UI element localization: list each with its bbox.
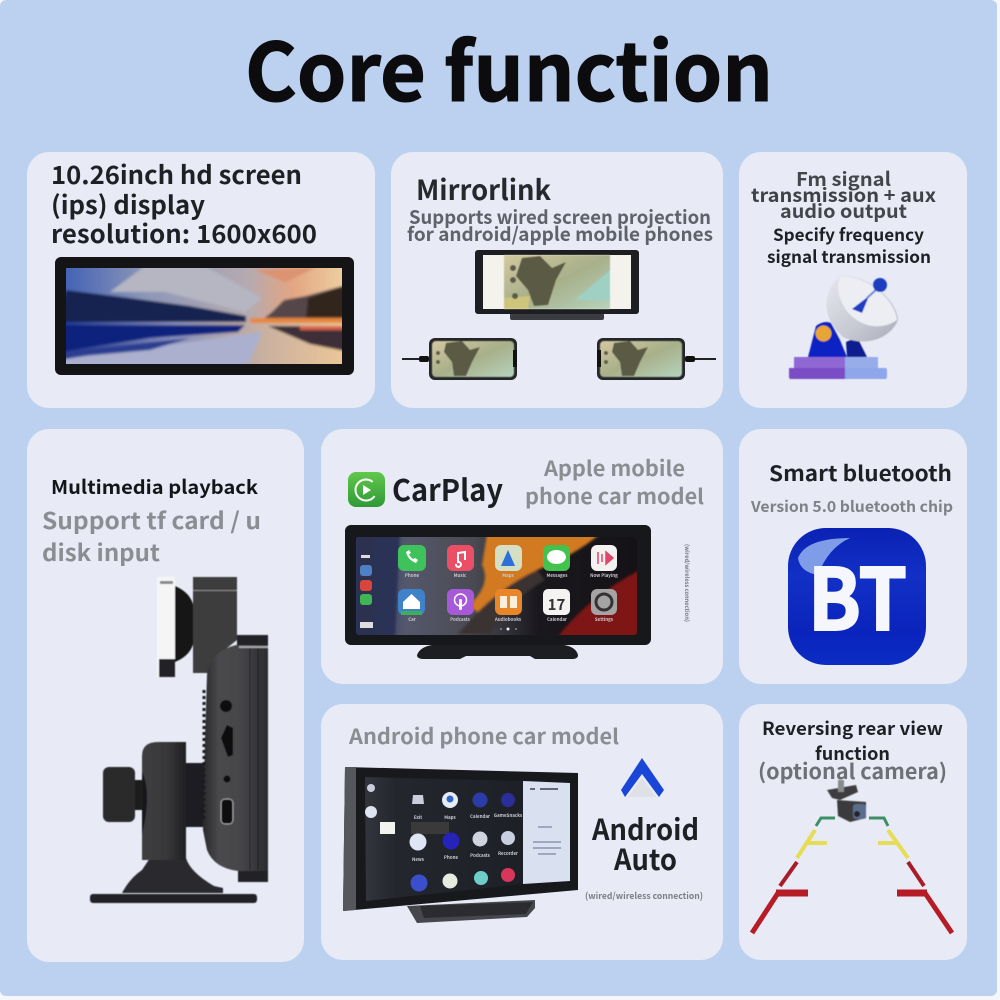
logo text: Android Auto: Auto bbox=[613, 837, 677, 879]
description: screen projection: for android/apple mobile phones bbox=[407, 220, 713, 247]
heading: screen specs: resolution: 1600x600 bbox=[51, 215, 317, 251]
description: optional camera: (optional camera) bbox=[758, 756, 947, 786]
logo text: Android Auto: Android bbox=[591, 807, 699, 849]
panel: smart bluetooth bbox=[739, 429, 967, 684]
carplay app icons: Maps bbox=[502, 573, 515, 579]
heading: screen specs: (ips) display bbox=[51, 186, 206, 222]
android app icons: Recorder bbox=[498, 851, 518, 857]
carplay app icons: Calendar bbox=[547, 617, 567, 623]
heading: screen specs: 10.26inch hd screen bbox=[51, 156, 302, 192]
carplay app icons: Podcasts bbox=[450, 617, 471, 623]
carplay app icons bbox=[398, 545, 618, 623]
android app icons: Podcasts bbox=[470, 853, 491, 859]
icon: satellite dish bbox=[789, 276, 898, 379]
description: tf card input: disk input bbox=[42, 534, 160, 568]
icon: rear camera bbox=[827, 780, 866, 822]
description: bluetooth chip: Version 5.0 bluetooth chip bbox=[750, 496, 953, 517]
heading: Mirrorlink: Mirrorlink bbox=[416, 169, 551, 209]
left phone with cable bbox=[402, 338, 517, 380]
carplay app icons: Audiobooks bbox=[494, 616, 522, 623]
heading: fm transmission: audio output bbox=[780, 197, 907, 224]
description: frequency: signal transmission bbox=[767, 243, 931, 268]
heading: apple car model bbox=[525, 453, 704, 511]
icon: carplay logo bbox=[348, 472, 385, 507]
heading: bluetooth: Smart bluetooth bbox=[769, 458, 952, 488]
heading: fm transmission bbox=[751, 165, 936, 224]
icon: BT badge: BT bbox=[808, 532, 907, 655]
heading: reversing: Reversing rear view bbox=[762, 715, 943, 741]
panel: mirrorlink bbox=[391, 152, 723, 408]
description: frequency bbox=[767, 221, 931, 268]
carplay head unit bbox=[345, 525, 651, 659]
panel: hd screen bbox=[27, 152, 375, 408]
heading: apple car model: phone car model bbox=[525, 481, 704, 511]
description: screen projection bbox=[407, 203, 713, 247]
heading: reversing bbox=[762, 715, 943, 766]
android app icons: Exit bbox=[414, 814, 422, 821]
logo text: Android Auto bbox=[591, 807, 699, 879]
heading: fm transmission: Fm signal bbox=[796, 165, 891, 192]
android app icons: Maps bbox=[444, 815, 457, 821]
parking guide lines bbox=[752, 818, 952, 933]
panel: carplay bbox=[321, 429, 723, 684]
carplay app icons: Phone bbox=[405, 573, 419, 579]
icon: android auto chevron bbox=[621, 758, 664, 797]
panel: android auto bbox=[321, 704, 723, 960]
carplay app icons: Settings bbox=[595, 616, 614, 623]
carplay app icons: Music bbox=[454, 572, 467, 579]
heading: screen specs bbox=[51, 156, 317, 251]
android app icons: News bbox=[412, 857, 425, 863]
heading: android car model: Android phone car model bbox=[348, 721, 619, 751]
description: screen projection: Supports wired screen projection bbox=[409, 203, 711, 230]
description: tf card input bbox=[42, 502, 261, 568]
head unit mirroring phone bbox=[475, 250, 639, 320]
android app icons: Phone bbox=[444, 855, 458, 861]
heading: multimedia: Multimedia playback bbox=[51, 473, 259, 500]
android app icons: GameSnacks bbox=[494, 812, 523, 819]
title: Core function bbox=[245, 9, 773, 125]
device side view bbox=[90, 577, 268, 903]
heading: apple car model: Apple mobile bbox=[543, 453, 685, 483]
android app icons bbox=[365, 784, 523, 892]
heading: fm transmission: transmission + aux bbox=[751, 181, 936, 208]
panel: fm signal bbox=[739, 152, 967, 408]
android head unit bbox=[343, 767, 578, 923]
android app icons: Calendar bbox=[470, 814, 490, 820]
screen with lake landscape bbox=[55, 257, 354, 375]
logo text: CarPlay: CarPlay bbox=[392, 466, 503, 510]
carplay app icons: Now Playing bbox=[590, 572, 618, 579]
carplay app icons: Car bbox=[408, 617, 416, 623]
description: frequency: Specify frequency bbox=[773, 221, 924, 246]
note: wired wireless: (wired/wireless connection) bbox=[585, 889, 703, 902]
note: vertical connection text: (wired/wireless connection) bbox=[683, 544, 692, 622]
carplay app icons: Messages bbox=[546, 573, 568, 579]
description: tf card input: Support tf card / u bbox=[42, 502, 261, 536]
panel: multimedia playback bbox=[27, 429, 304, 962]
right phone with cable bbox=[597, 338, 716, 380]
carplay app icons: 17 bbox=[548, 594, 565, 615]
panel: rear view bbox=[739, 704, 967, 960]
heading: reversing: function bbox=[815, 740, 890, 766]
